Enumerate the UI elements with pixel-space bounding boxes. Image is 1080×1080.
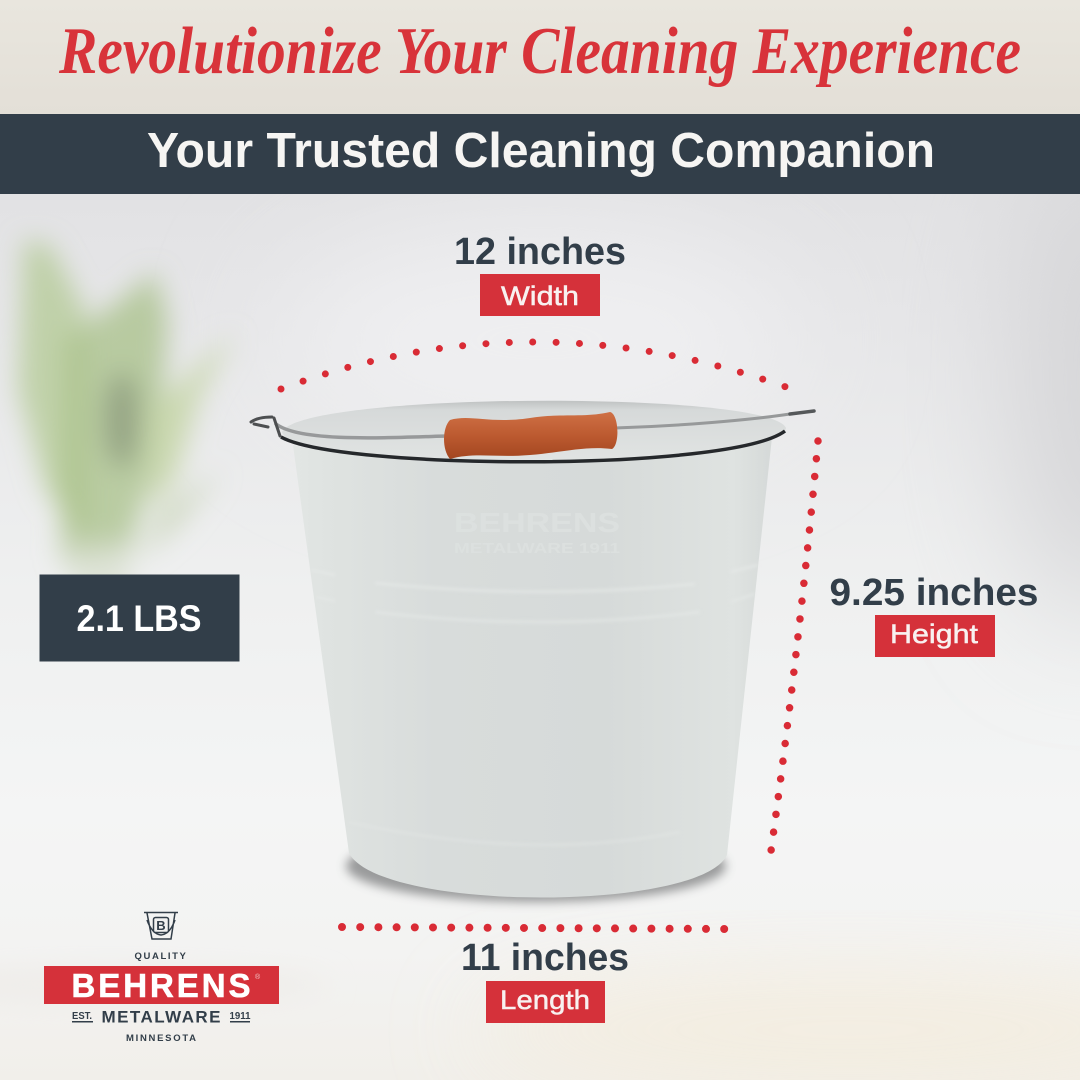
logo bucket icon [144,912,178,939]
logo: MINNESOTA [126,1033,196,1044]
width dotted arc [281,342,786,389]
subtitle band [0,114,1080,194]
length dotted line [342,927,725,929]
height label [830,572,1038,657]
width label [454,231,626,316]
logo: 1911 [230,1010,251,1022]
bucket body [293,437,772,898]
height label: 9.25 inches [830,572,1038,614]
subtitle band: Your Trusted Cleaning Companion [147,124,935,178]
logo: QUALITY [135,951,187,962]
embossed brand: BEHRENS [454,507,620,538]
blurred plant [18,240,236,600]
wire handle [251,411,814,438]
length label [461,937,629,1023]
embossed brand [454,507,620,557]
length label: 11 inches [461,937,629,979]
height dotted line [771,441,818,851]
rim [281,431,785,462]
logo: EST. [72,1010,92,1022]
wood grip [444,412,617,459]
logo [44,912,279,1044]
logo: METALWARE [102,1008,220,1026]
length label: Length [500,985,590,1015]
height label: Height [890,619,979,649]
bucket highlights [311,565,758,845]
logo: BEHRENS [72,967,250,1004]
embossed brand: METALWARE 1911 [454,540,620,557]
width label: Width [501,281,579,311]
logo bucket icon: B [156,918,166,933]
weight badge: 2.1 LBS [76,598,202,639]
top banner background [0,0,1080,114]
bucket [251,401,814,902]
bucket interior [282,401,786,462]
weight badge [40,574,240,662]
bucket shadow [346,830,726,902]
width label: 12 inches [454,231,626,273]
logo: ® [255,973,261,981]
